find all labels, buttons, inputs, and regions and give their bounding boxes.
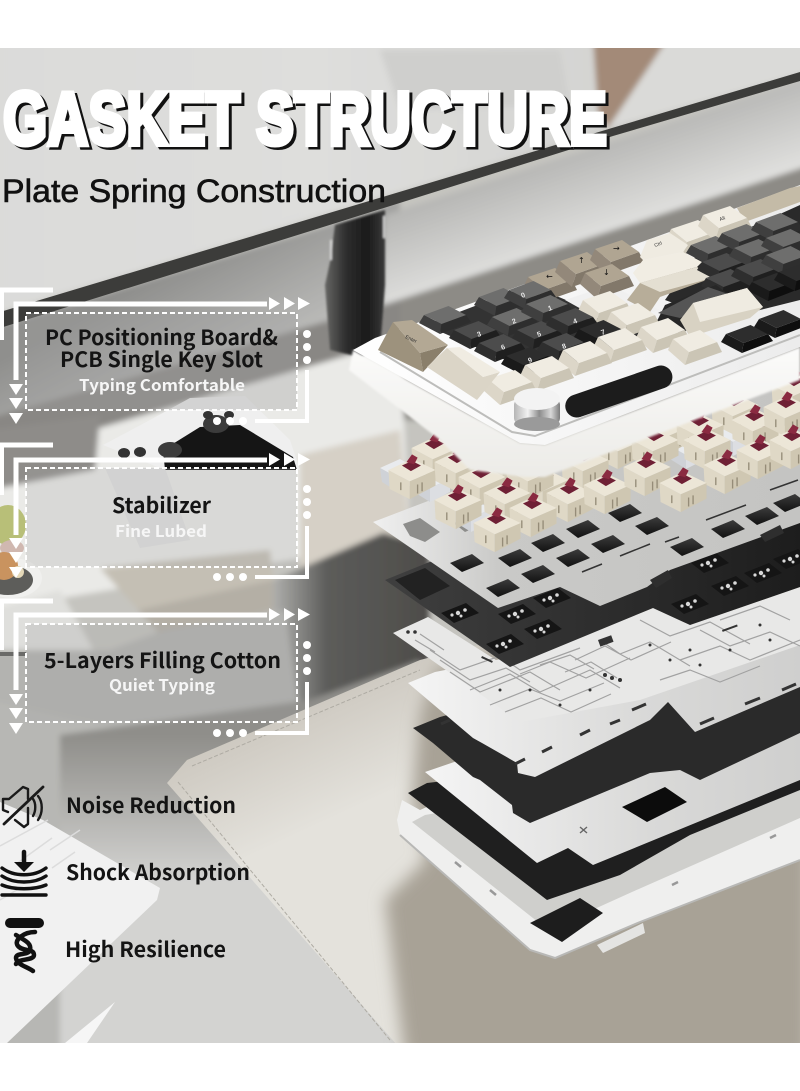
arrow keys xyxy=(523,240,644,303)
succulent plant xyxy=(0,505,42,598)
keycap legends: → xyxy=(613,244,620,253)
monitor edge xyxy=(0,72,800,328)
panel: stabilizer: Stabilizer xyxy=(112,490,212,520)
panel: filling cotton: 5-Layers Filling Cotton xyxy=(44,645,281,675)
keycap legends: 6 xyxy=(500,344,506,352)
feature: high resilience xyxy=(5,918,226,971)
panel: stabilizer xyxy=(0,443,311,581)
black plate xyxy=(385,430,800,667)
mid-left paper block base xyxy=(0,652,26,656)
panel: filling cotton xyxy=(0,599,311,737)
panel: PC positioning board: PC Positioning Board& xyxy=(45,322,278,352)
keycap legends: 7 xyxy=(600,329,606,337)
icon: muted speaker xyxy=(3,787,43,827)
desk mat xyxy=(167,560,800,1060)
keycap legends: ← xyxy=(546,272,553,281)
feature: noise reduction: Noise Reduction xyxy=(66,790,236,820)
keycap legends: 5 xyxy=(536,331,542,339)
space bar xyxy=(737,186,800,222)
panel: PC positioning board: PCB Single Key Slot xyxy=(60,344,263,374)
white layer 3 xyxy=(425,640,800,865)
keycap legends: 9 xyxy=(527,357,533,365)
panel: PC positioning board xyxy=(0,288,311,425)
keycap legends: 3 xyxy=(476,331,482,339)
keycap legends: 1 xyxy=(547,305,553,313)
feature: high resilience: High Resilience xyxy=(65,934,226,964)
keycap legends: 4 xyxy=(572,318,578,326)
stylus xyxy=(65,1002,115,1043)
keycap legends: 8 xyxy=(561,343,567,351)
icon: spring xyxy=(5,918,44,971)
keyboard case xyxy=(349,185,800,477)
keycap legends: 0 xyxy=(520,292,526,300)
feature: noise reduction xyxy=(3,787,236,827)
feature: shock absorption: Shock Absorption xyxy=(66,857,250,887)
black layer 2 xyxy=(413,620,800,823)
keycap legends: Enter xyxy=(404,334,418,345)
icon: shock waves xyxy=(2,852,46,895)
modifier keys xyxy=(627,206,752,312)
steel plate xyxy=(373,380,800,608)
keycap legends: ↑ xyxy=(578,256,585,265)
exploded keyboard xyxy=(349,185,800,958)
case clip xyxy=(597,923,645,953)
cream navigation keys xyxy=(578,288,800,365)
monitor stand xyxy=(325,210,385,357)
bottom case xyxy=(397,640,800,958)
game controller xyxy=(103,396,300,548)
keycaps xyxy=(378,186,800,405)
keycap legends: 2 xyxy=(511,318,517,326)
title: GASKET STRUCTURE xyxy=(3,76,607,160)
tablet keyboard xyxy=(0,802,160,1043)
feature: shock absorption xyxy=(2,852,250,895)
display screen xyxy=(562,362,676,421)
knob xyxy=(514,388,560,431)
panel: filling cotton: Quiet Typing xyxy=(109,672,215,696)
keycap legends: Alt xyxy=(719,215,727,223)
keycap legends: ↓ xyxy=(603,268,610,277)
panel: PC positioning board: Typing Comfortable xyxy=(79,372,245,396)
switches xyxy=(380,369,800,552)
PCB xyxy=(393,587,800,722)
panel: stabilizer: Fine Lubed xyxy=(115,518,207,542)
dark alpha keys xyxy=(655,213,800,335)
numpad xyxy=(378,281,647,405)
bottom black board xyxy=(530,898,603,942)
white layer 1 xyxy=(408,600,800,777)
keycap legends xyxy=(404,215,727,365)
title: GASKET STRUCTURE xyxy=(6,79,610,163)
subtitle: Plate Spring Construction xyxy=(2,173,386,209)
keycap legends: Ctrl xyxy=(654,241,663,249)
black layer 4 xyxy=(408,740,800,900)
